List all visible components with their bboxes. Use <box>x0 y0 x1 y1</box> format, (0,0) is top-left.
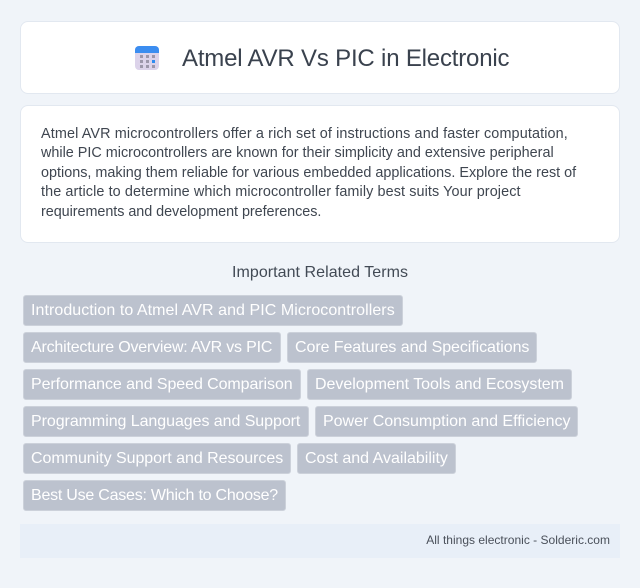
tag: Power Consumption and Efficiency <box>323 413 571 430</box>
tag <box>23 295 403 326</box>
text block: description: the article to determine which microcontroller family best suits Your project <box>41 184 521 200</box>
tag <box>23 332 281 363</box>
tag <box>287 332 537 363</box>
icon: calendar <box>135 46 159 70</box>
text block: description: while PIC microcontrollers are known for their simplicity and extensive peripheral <box>41 145 554 161</box>
panel: description <box>20 105 620 243</box>
tag <box>23 406 309 437</box>
tag <box>297 443 456 474</box>
tag <box>23 480 286 511</box>
tag: Development Tools and Ecosystem <box>315 376 564 393</box>
text block: description: options, making them reliable for various embedded applications. Explore the rest of <box>41 165 576 181</box>
tag: Best Use Cases: Which to Choose? <box>31 487 278 504</box>
footer text: All things electronic - Solderic.com <box>426 533 610 547</box>
tag: Community Support and Resources <box>31 450 283 467</box>
tag <box>307 369 572 400</box>
tag <box>23 443 291 474</box>
tag: Core Features and Specifications <box>295 339 529 356</box>
tag: Architecture Overview: AVR vs PIC <box>31 339 272 356</box>
tag <box>315 406 578 437</box>
tag: Introduction to Atmel AVR and PIC Microcontrollers <box>31 302 395 319</box>
tag group <box>23 295 578 511</box>
tag <box>23 369 301 400</box>
heading: important related terms: Important Related Terms <box>232 264 408 281</box>
text block: description: Atmel AVR microcontrollers offer a rich set of instructions and faster computation, <box>41 126 568 142</box>
tag: Cost and Availability <box>305 450 448 467</box>
panel: header <box>20 21 620 94</box>
footer <box>20 524 620 558</box>
tag: Programming Languages and Support <box>31 413 300 430</box>
tag: Performance and Speed Comparison <box>31 376 293 393</box>
text block: description: requirements and development preferences. <box>41 204 321 220</box>
text block: description <box>41 126 576 220</box>
title: Atmel AVR Vs PIC in Electronic <box>182 45 509 72</box>
